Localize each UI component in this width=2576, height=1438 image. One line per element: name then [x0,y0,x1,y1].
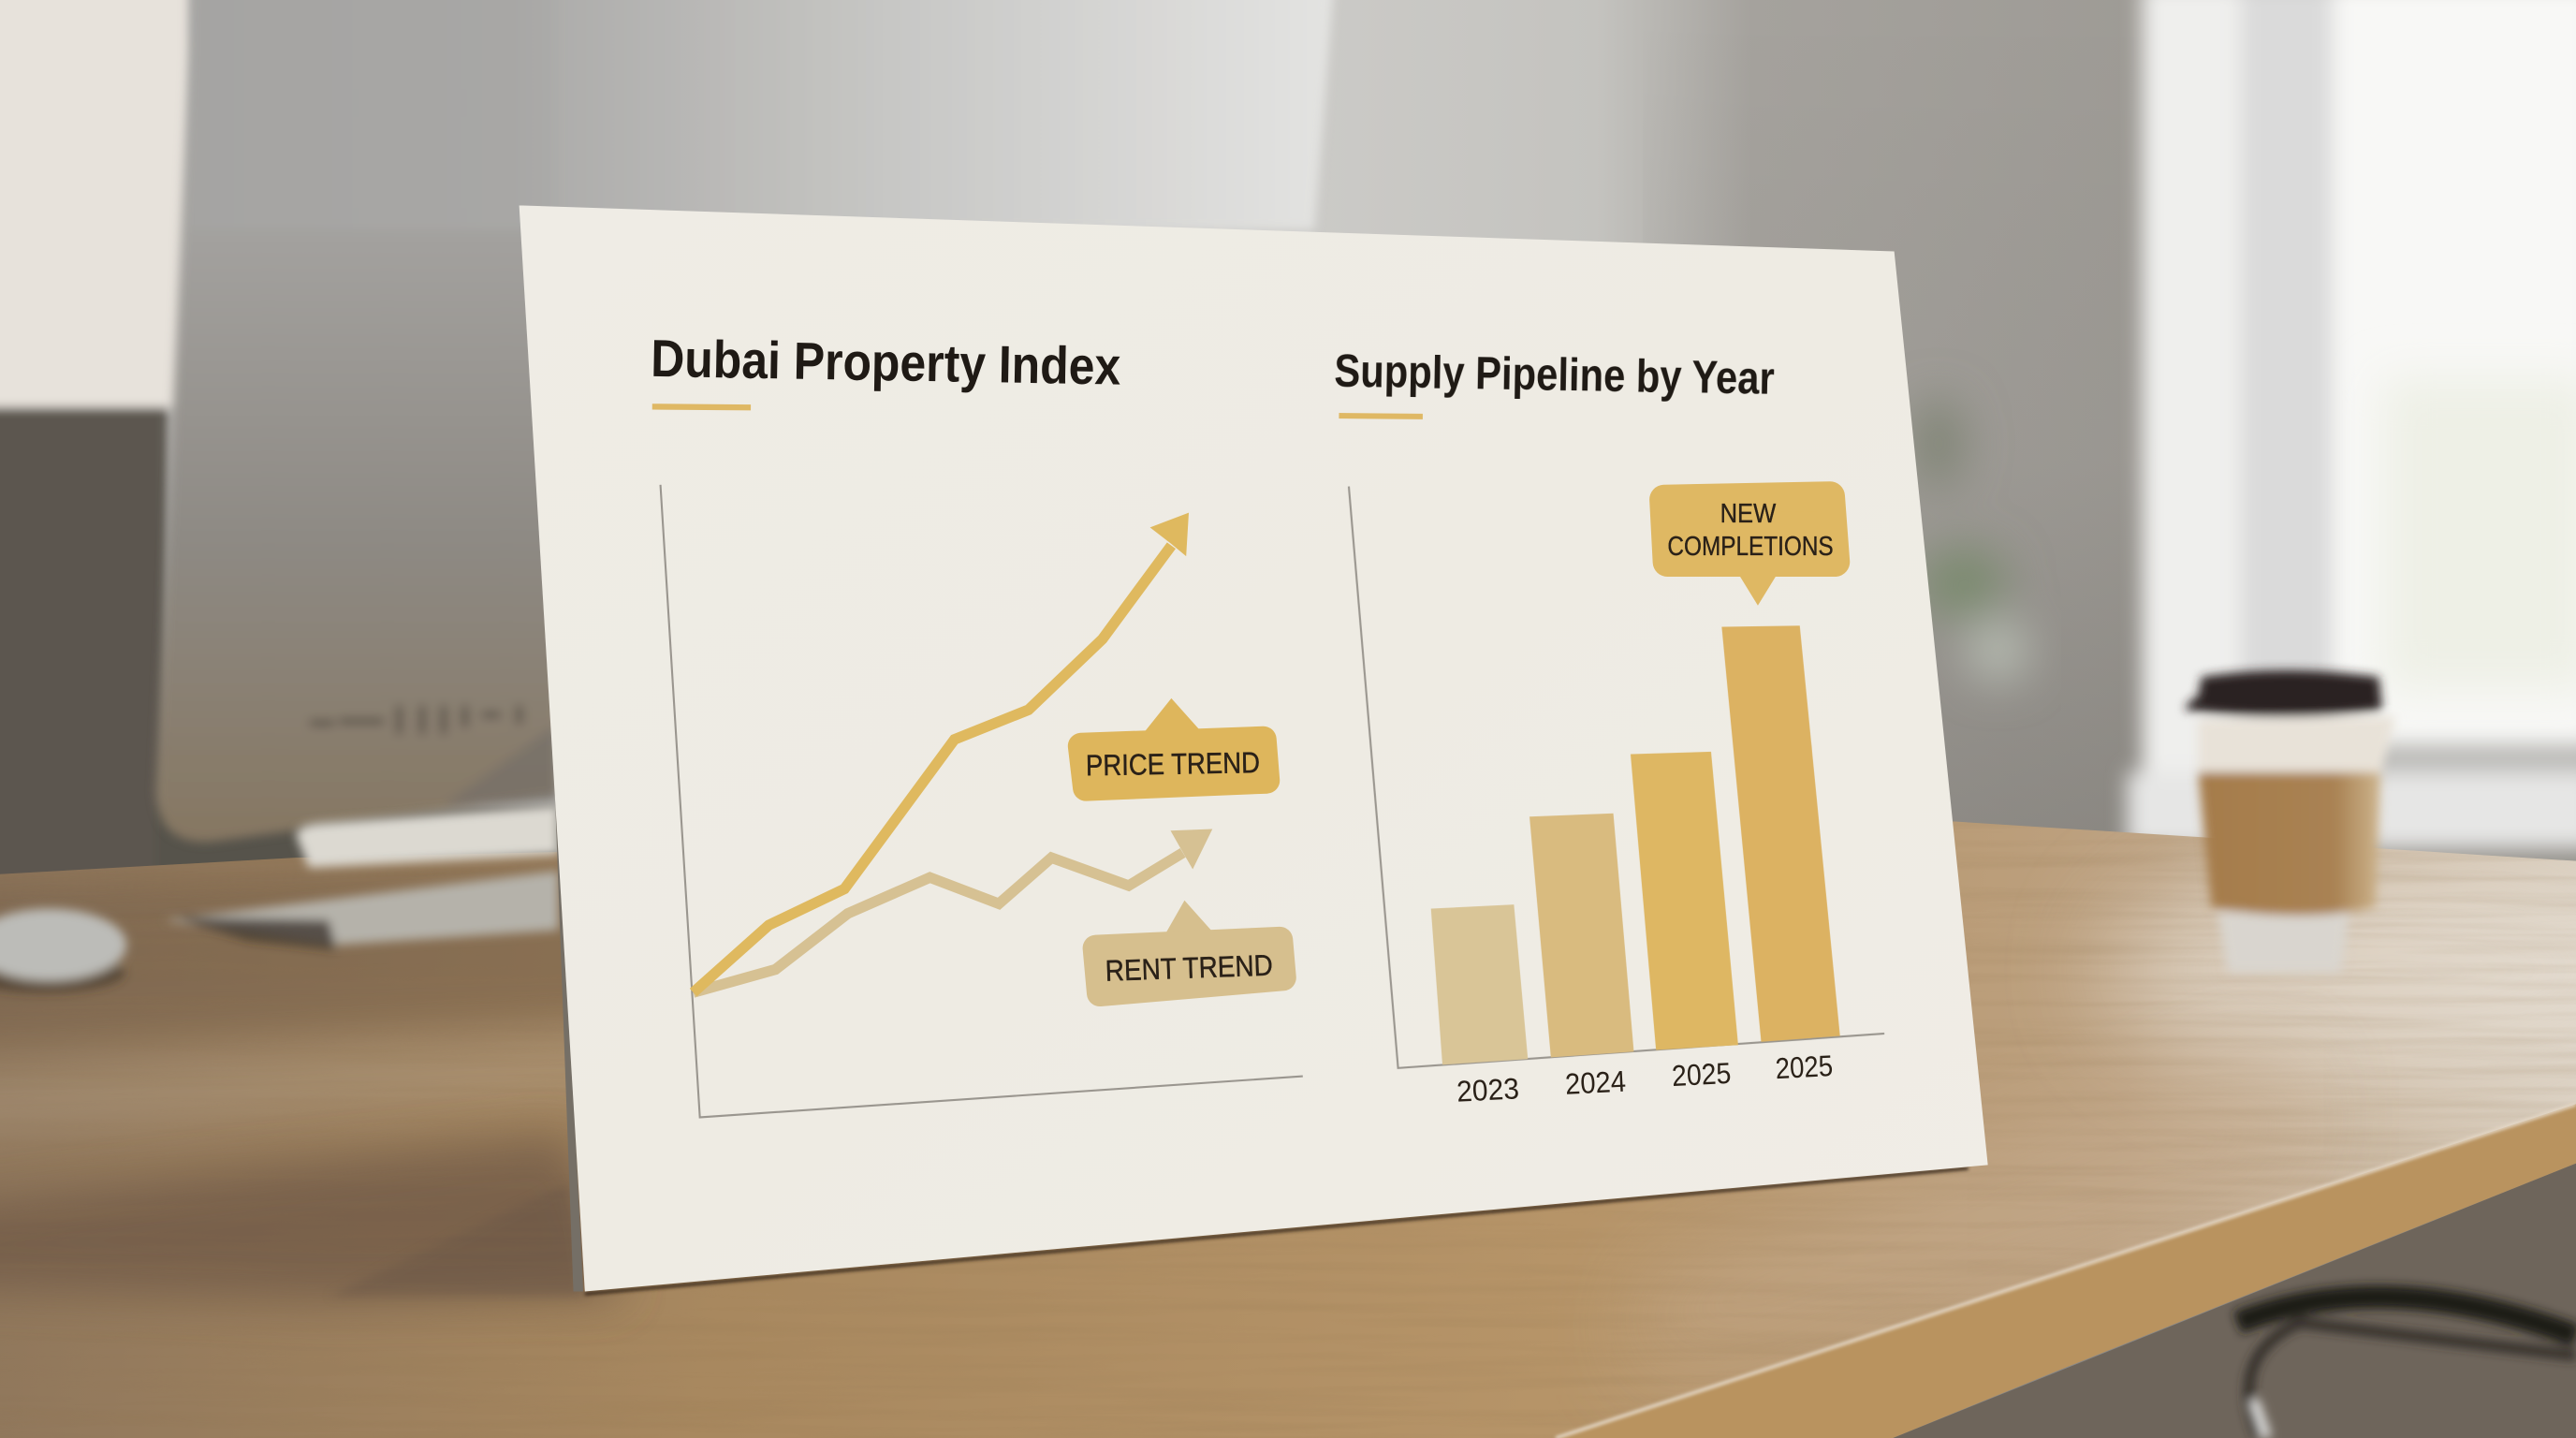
background: window [2128,0,2576,848]
under-desk shadow area [1893,1164,2576,1438]
desk surface [0,822,2576,1438]
price trend line with arrow [694,513,1189,992]
background: monitor [156,0,1334,842]
panel: property index chart [651,329,1303,1117]
bar 2024 [1530,814,1633,1057]
chair behind desk [2237,1297,2576,1438]
background: left wall panel [0,0,559,903]
background: wall [0,0,2576,920]
heading underline [1339,414,1423,418]
desk front edge [1556,1104,2576,1438]
keyboard and tray [165,805,559,949]
heading underline [652,405,751,409]
mouse [0,909,126,992]
year labels: 2025 [1775,1049,1834,1085]
callout: price trend [1081,698,1266,788]
callout: new completions: NEW [1720,499,1777,529]
chart axes [1349,487,1884,1068]
panel: printed card [520,205,1988,1292]
year labels: 2025 [1671,1056,1732,1093]
bar 2023 [1431,904,1528,1064]
year labels [1456,1049,1834,1108]
card edge [544,493,583,1292]
bar 2025 first [1631,752,1738,1050]
year labels: 2023 [1456,1071,1520,1108]
background: window greenery [2382,378,2576,690]
heading: Supply Pipeline by Year: Supply Pipeline by Year [1334,345,1775,404]
coffee cup [2185,670,2395,973]
background: blurred plant [1915,398,2027,681]
callout: new completions: COMPLETIONS [1667,532,1834,562]
callout: rent trend: RENT TREND [1105,948,1273,988]
year labels: 2024 [1564,1064,1627,1101]
chart axes [661,485,1303,1117]
rent trend line with arrow [694,829,1212,992]
callout: new completions [1664,496,1835,606]
heading: Dubai Property Index: Dubai Property Index [651,329,1121,396]
callout: price trend: PRICE TREND [1086,745,1260,782]
panel: supply pipeline chart [1334,345,1884,1108]
card shadow line [585,1168,1969,1294]
bar 2025 second [1721,625,1840,1042]
callout: rent trend [1096,901,1283,993]
